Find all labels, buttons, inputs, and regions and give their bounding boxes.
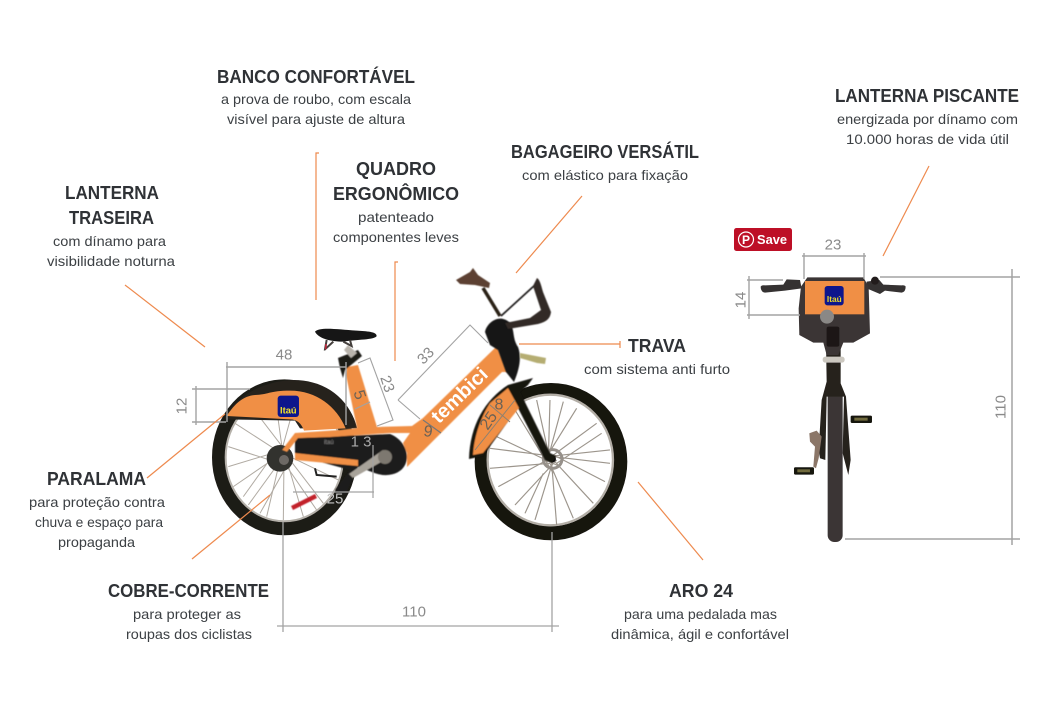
leader: bagageiro bbox=[516, 196, 582, 273]
fork bbox=[819, 342, 851, 475]
leader: banco bbox=[316, 153, 319, 300]
dimension 110 height: 110 bbox=[992, 395, 1010, 419]
dimension 13: 1 3 bbox=[351, 434, 371, 450]
dimension 5 bbox=[350, 388, 370, 409]
frame and chain guard: itaú bbox=[324, 440, 334, 446]
dimension 9 bbox=[422, 420, 441, 441]
text: trava: com sistema anti furto bbox=[584, 361, 730, 377]
leader: cobre-corrente bbox=[192, 495, 270, 559]
front wheel bbox=[828, 389, 843, 542]
front fork, fender and head tube bbox=[469, 319, 556, 463]
leader: lanterna traseira bbox=[125, 285, 205, 347]
Itaú logo bbox=[825, 286, 844, 305]
stem bbox=[827, 327, 839, 347]
leader: lanterna piscante bbox=[883, 166, 929, 256]
text: paralama bbox=[29, 469, 165, 550]
text: lanterna traseira: visibilidade noturna bbox=[47, 253, 175, 269]
rear fender with Itaú logo bbox=[225, 380, 357, 431]
text: banco confortável bbox=[217, 66, 415, 127]
dimension 14 bbox=[732, 276, 800, 319]
leader: aro bbox=[638, 482, 703, 560]
lamp bbox=[820, 310, 834, 324]
Pinterest save button: P bbox=[742, 233, 750, 247]
text: lanterna traseira: TRASEIRA bbox=[69, 208, 154, 228]
text: quadro ergonômico: QUADRO bbox=[356, 159, 436, 179]
front view bicycle bbox=[761, 277, 906, 542]
stem clamp bbox=[823, 357, 845, 363]
dimension 14: 14 bbox=[732, 292, 750, 308]
Pinterest save button: Save bbox=[757, 232, 787, 247]
text: lanterna traseira: LANTERNA bbox=[65, 183, 159, 203]
Itaú logo: Itaú bbox=[827, 294, 842, 304]
front view dimensions bbox=[732, 236, 1020, 545]
front wheel bbox=[482, 390, 620, 533]
crankset bbox=[809, 431, 822, 468]
text: quadro ergonômico: patenteado bbox=[358, 209, 434, 225]
text: lanterna piscante: 10.000 horas de vida útil bbox=[846, 131, 1009, 147]
leader: quadro bbox=[395, 262, 398, 361]
dimension 33: 33 bbox=[414, 344, 438, 368]
dimension 48 bbox=[226, 346, 346, 425]
text: trava bbox=[584, 336, 730, 377]
dimension 110 length bbox=[277, 522, 559, 632]
text: lanterna piscante bbox=[835, 86, 1019, 147]
dimension 33 bbox=[398, 325, 488, 419]
text: lanterna piscante: energizada por dínamo com bbox=[837, 111, 1018, 127]
dimension 25 at the crank bbox=[293, 490, 374, 508]
dimension 110 length: 110 bbox=[402, 604, 426, 620]
side view dimensions bbox=[174, 325, 559, 632]
text: banco confortável: visível para ajuste de altura bbox=[227, 111, 405, 127]
text: lanterna traseira: com dínamo para bbox=[53, 233, 166, 249]
left pedal bbox=[794, 467, 814, 475]
text: cobre-corrente: roupas dos ciclistas bbox=[126, 626, 252, 642]
dimension 23 bbox=[358, 358, 398, 426]
handlebar bbox=[761, 277, 906, 294]
dimension 13 bbox=[351, 434, 373, 498]
text: bagageiro versátil bbox=[511, 141, 699, 183]
dimension 23 bbox=[802, 236, 866, 279]
text: bagageiro versátil: BAGAGEIRO VERSÁTIL bbox=[511, 141, 699, 162]
text: lanterna traseira bbox=[47, 183, 175, 269]
text: banco confortável: a prova de roubo, com escala bbox=[221, 91, 411, 107]
text: lanterna piscante: LANTERNA PISCANTE bbox=[835, 86, 1019, 106]
text: trava: TRAVA bbox=[628, 336, 686, 356]
text: cobre-corrente bbox=[108, 581, 269, 642]
saddle bbox=[315, 329, 377, 349]
Pinterest save button bbox=[734, 228, 792, 251]
dimension 23: 23 bbox=[825, 236, 841, 254]
text: bagageiro versátil: com elástico para fixação bbox=[522, 167, 688, 183]
dimension 48: 48 bbox=[276, 346, 292, 364]
text: aro 24: dinâmica, ágil e confortável bbox=[611, 626, 789, 642]
front basket bbox=[799, 277, 870, 355]
text: banco confortável: BANCO CONFORTÁVEL bbox=[217, 66, 415, 87]
rear fender with Itaú logo: Itaú bbox=[280, 405, 297, 415]
dimension 110 height bbox=[845, 269, 1020, 545]
text: paralama: propaganda bbox=[58, 534, 135, 550]
dimension 25 and 8 on front fender: 25 bbox=[477, 409, 501, 433]
rear wheel bbox=[219, 386, 350, 529]
dimension 12: 12 bbox=[174, 398, 190, 414]
text: paralama: PARALAMA bbox=[47, 469, 146, 489]
dimension 23: 23 bbox=[376, 373, 398, 395]
dimension 25 at the crank: 25 bbox=[327, 490, 343, 508]
leader: trava bbox=[519, 341, 620, 348]
callout leader lines bbox=[125, 153, 929, 560]
dimension 12 bbox=[174, 386, 250, 425]
text: aro 24: para uma pedalada mas bbox=[624, 606, 777, 622]
basket orange panel bbox=[805, 281, 864, 314]
side view bicycle bbox=[219, 268, 620, 533]
dimension 9: 9 bbox=[422, 423, 434, 441]
dimension 25 and 8 on front fender bbox=[475, 396, 515, 450]
text: cobre-corrente: para proteger as bbox=[133, 606, 241, 622]
wordmark tembici: tembici bbox=[427, 363, 493, 428]
text: paralama: para proteção contra bbox=[29, 494, 165, 510]
dimension 25 and 8 on front fender: 8 bbox=[495, 396, 504, 414]
dimension 5: 5 bbox=[350, 388, 368, 402]
text: cobre-corrente: COBRE-CORRENTE bbox=[108, 581, 269, 601]
leader: paralama bbox=[147, 414, 225, 478]
text: aro 24 bbox=[611, 581, 789, 642]
text: quadro ergonômico bbox=[333, 159, 459, 245]
text: quadro ergonômico: ERGONÔMICO bbox=[333, 183, 459, 204]
text: quadro ergonômico: componentes leves bbox=[333, 229, 459, 245]
text: paralama: chuva e espaço para bbox=[35, 514, 163, 530]
handlebar and front rack bbox=[456, 268, 551, 364]
text: aro 24: ARO 24 bbox=[669, 581, 733, 601]
right pedal bbox=[851, 416, 872, 423]
frame and chain guard bbox=[282, 345, 508, 508]
